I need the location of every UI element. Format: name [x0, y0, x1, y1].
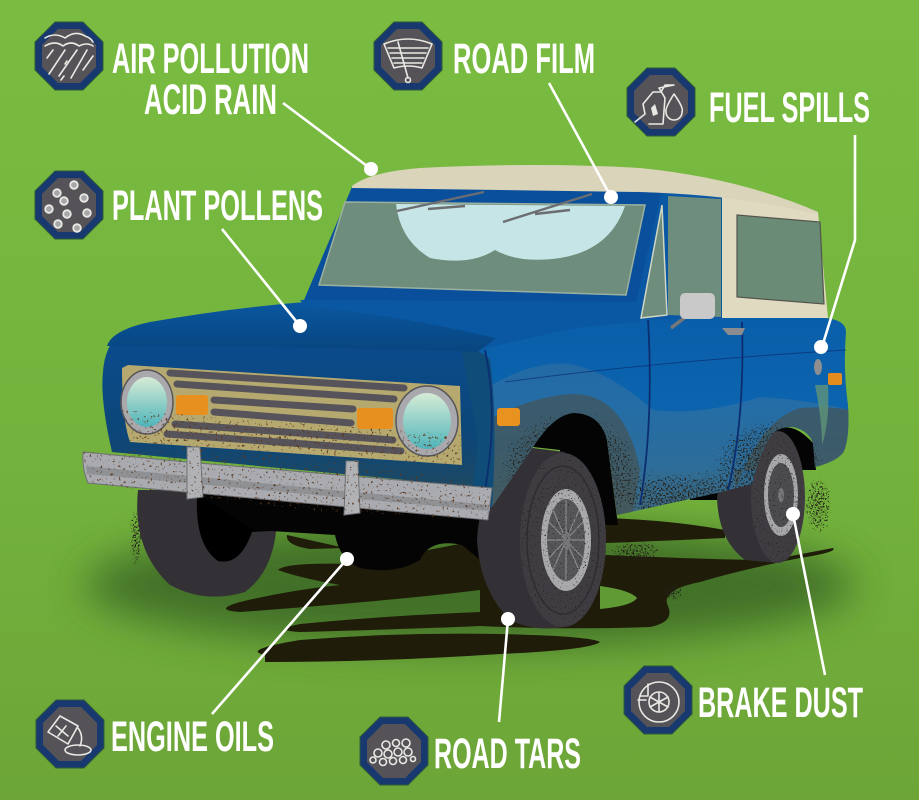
body base fill: [300, 298, 660, 372]
cream rear cab: [722, 196, 828, 318]
callout: brake dust line: [786, 507, 825, 675]
side window: [668, 196, 721, 317]
rear arch interior: [690, 427, 816, 500]
callout: air pollution line: [283, 103, 378, 176]
door handle: [722, 328, 745, 335]
icon: plant pollens: [35, 171, 103, 239]
grille mud: [122, 410, 462, 465]
far front wheel: [137, 490, 290, 597]
label: road film: ROAD FILM: [453, 35, 595, 83]
rear side markers: [814, 359, 842, 445]
roof: [352, 165, 818, 214]
cowl: [300, 298, 650, 338]
label: acid rain: ACID RAIN: [144, 76, 277, 124]
windshield glass: [319, 202, 645, 295]
rear window: [737, 215, 824, 304]
front fascia: [102, 342, 484, 505]
side body dirt: [490, 364, 848, 515]
side body: [470, 316, 848, 515]
mirror: [671, 293, 715, 328]
hood: [107, 302, 500, 352]
bumper: [83, 447, 492, 520]
windshield frame: [304, 187, 662, 302]
grille slats: [167, 373, 404, 451]
clean wiped area: [396, 204, 625, 261]
side cab pillar: [632, 190, 722, 320]
ground shadow: [85, 523, 855, 647]
front near wheel: [477, 447, 606, 628]
oil puddle shadow: [226, 518, 834, 662]
icon: engine oil can: [36, 700, 104, 768]
label: air pollution: AIR POLLUTION: [112, 35, 309, 83]
headlights: [121, 370, 458, 456]
callout: plant pollens line: [222, 229, 307, 333]
fender corner: [462, 351, 495, 508]
label: plant pollens: PLANT POLLENS: [112, 182, 323, 230]
undercarriage: [190, 490, 492, 570]
truck: [83, 165, 855, 628]
callout: road film line: [549, 83, 618, 204]
grille panel: [122, 365, 462, 465]
label: engine oils: ENGINE OILS: [111, 713, 274, 761]
callout: engine oils line: [212, 552, 354, 714]
amber lights: [176, 395, 393, 429]
icon: road tars: [360, 717, 428, 785]
icon: fuel nozzle and drop: [627, 68, 695, 136]
callout: road tars line: [499, 612, 515, 722]
icon: air pollution: [35, 22, 103, 90]
green gap in puddle: [600, 586, 637, 609]
front arch interior: [533, 412, 618, 525]
icon: road film: [374, 22, 442, 90]
vent window: [641, 205, 667, 318]
wipers: [397, 192, 592, 222]
icon: brake disc: [624, 666, 692, 734]
door lines: [482, 320, 846, 505]
label: road tars: ROAD TARS: [434, 730, 581, 778]
front side marker: [497, 408, 520, 426]
callout: fuel spills line: [814, 135, 855, 354]
dirt spray on ground: [127, 463, 838, 604]
rear wheel: [717, 431, 805, 563]
